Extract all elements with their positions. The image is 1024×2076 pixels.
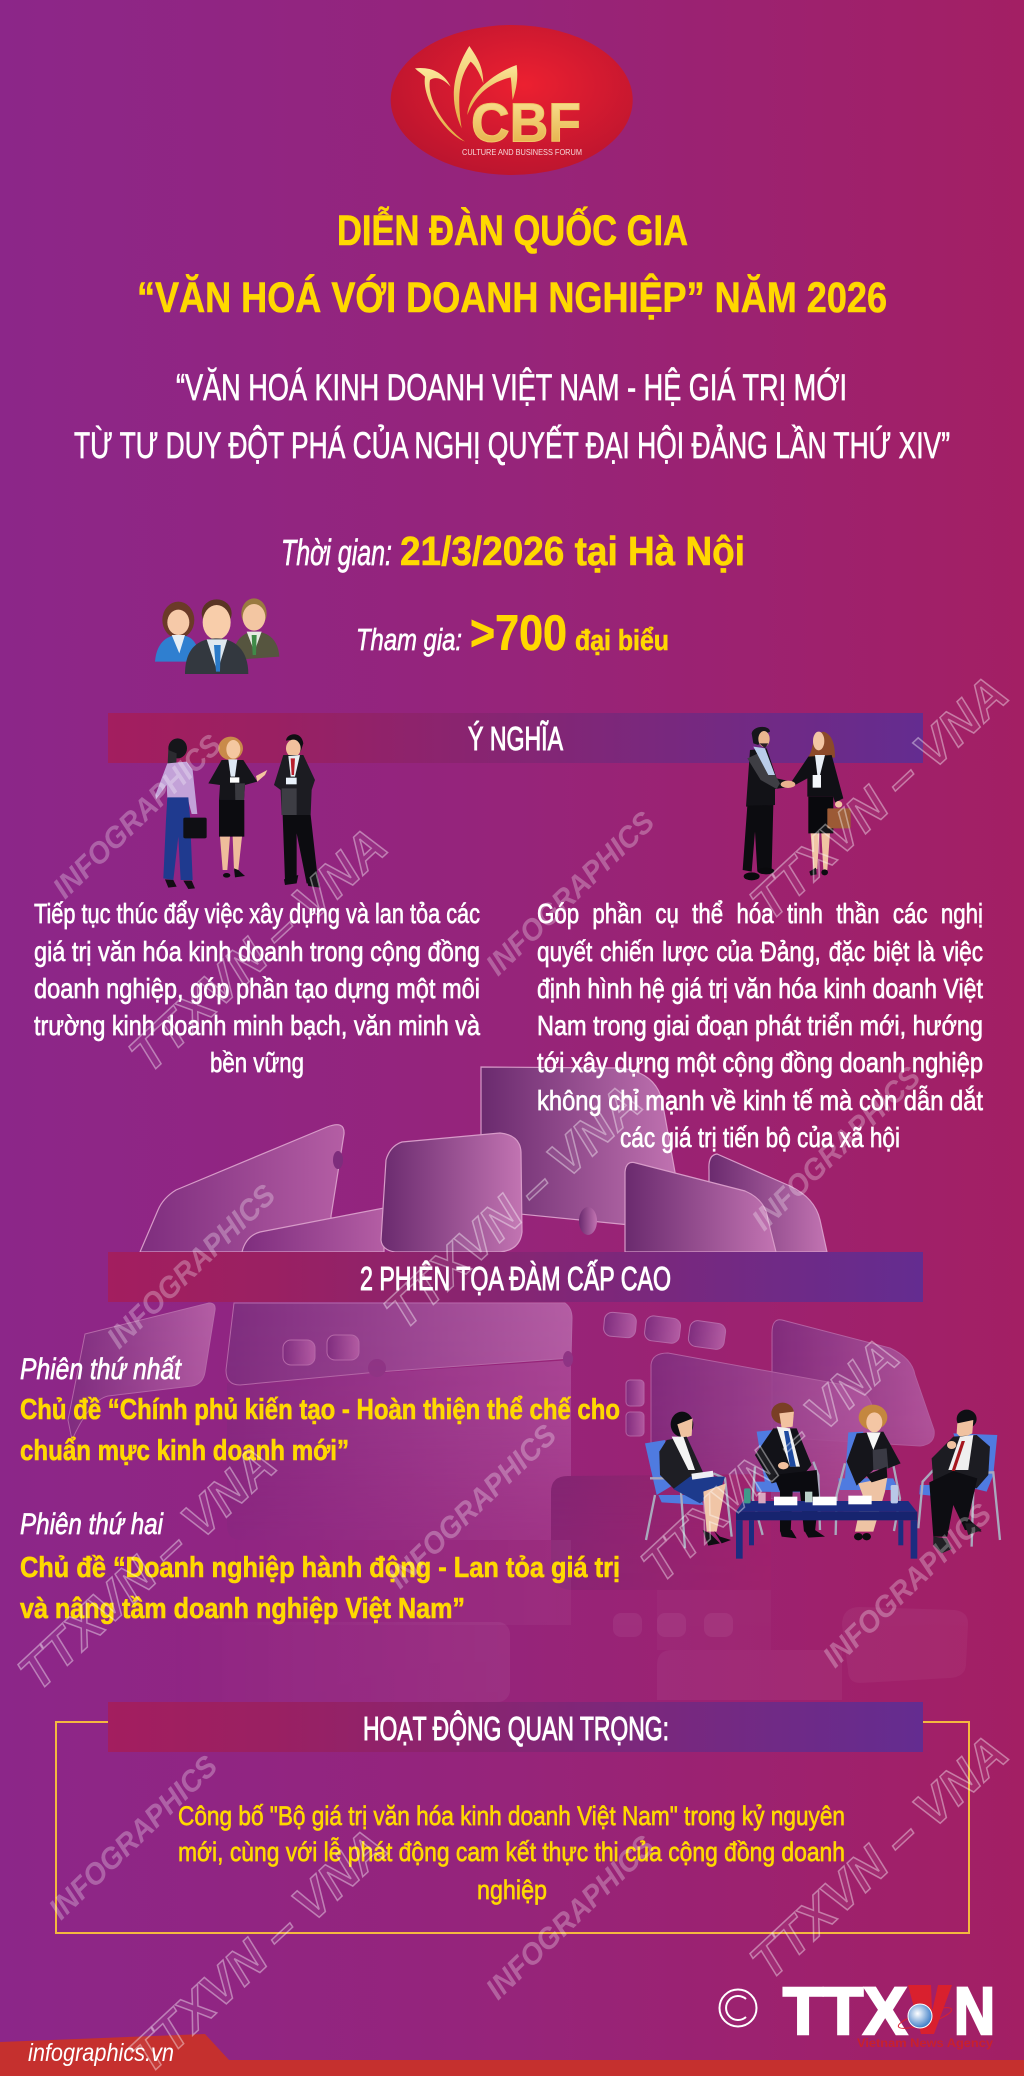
participants: >700 <box>470 605 567 661</box>
person: woman left <box>659 1412 731 1546</box>
banner: HOẠT ĐỘNG QUAN TRỌNG: HOẠT ĐỘNG QUAN TRỌNG: <box>363 1710 669 1747</box>
footer text: infographics.vn <box>28 2039 174 2067</box>
banner: Ý NGHĨA <box>108 713 923 763</box>
text: first session <box>20 1353 620 1467</box>
watermarks: INFOGRAPHICS <box>382 1418 563 1595</box>
text: key activity: nghiệp <box>477 1875 547 1905</box>
logo: TTXVN: Vietnam News Agency <box>857 2036 993 2050</box>
background illustration: lower devices <box>68 1303 968 1702</box>
watermarks: INFOGRAPHICS <box>746 1060 927 1237</box>
text: key activity <box>178 1801 845 1905</box>
text: key activity: mới, cùng với lễ phát động cam kết thực thi của cộng đồng doanh <box>178 1836 845 1867</box>
footer ribbon <box>0 2034 1024 2076</box>
logo: CBF: CULTURE AND BUSINESS FORUM <box>462 147 582 157</box>
person: man with blue tie <box>755 1403 825 1538</box>
text: second session: Phiên thứ hai <box>20 1508 164 1541</box>
text: second session: Chủ đề “Doanh nghiệp hành động - Lan tỏa giá trị <box>20 1552 620 1584</box>
text: key activity: Công bố "Bộ giá trị văn hóa kinh doanh Việt Nam" trong kỷ nguyên <box>178 1801 845 1831</box>
background illustration: tablets and phones <box>140 1067 827 1252</box>
text: meaning left column: doanh nghiệp, góp phần tạo dựng một môi <box>34 973 480 1004</box>
table items <box>744 1485 898 1505</box>
time and place <box>281 528 745 574</box>
time and place: Thời gian: <box>281 532 392 573</box>
illustration: three business people talking <box>155 734 320 889</box>
logo: CBF <box>391 25 633 175</box>
text: meaning right column <box>537 898 983 1153</box>
text: second session <box>20 1508 620 1625</box>
text: second session: và nâng tầm doanh nghiệp Việt Nam” <box>20 1593 465 1625</box>
title: “VĂN HOÁ VỚI DOANH NGHIỆP” NĂM 2026 <box>137 273 887 322</box>
icon: three delegates <box>155 598 279 674</box>
person: woman with blonde hair <box>847 1405 901 1540</box>
text: meaning right column: các giá trị tiến bộ của xã hội <box>620 1122 900 1153</box>
logo: TTXVN <box>783 1974 995 2050</box>
banner: Ý NGHĨA: Ý NGHĨA <box>468 720 563 757</box>
panel: key activity box <box>56 1702 969 1933</box>
title: DIỄN ĐÀN QUỐC GIA <box>337 206 688 255</box>
chairs <box>645 1430 1000 1548</box>
banner: 2 PHIÊN TỌA ĐÀM CẤP CAO <box>108 1252 923 1302</box>
text: meaning left column: giá trị văn hóa kinh doanh trong cộng đồng <box>34 936 480 967</box>
banner: 2 PHIÊN TỌA ĐÀM CẤP CAO: 2 PHIÊN TỌA ĐÀM CẤP CAO <box>360 1260 671 1297</box>
text: meaning left column: Tiếp tục thúc đẩy việc xây dựng và lan tỏa các <box>34 898 480 929</box>
watermarks: TTXVN – VNA <box>739 665 1019 931</box>
watermarks: INFOGRAPHICS <box>101 1178 282 1355</box>
text: first session: Chủ đề “Chính phủ kiến tạo - Hoàn thiện thể chế cho <box>20 1394 620 1426</box>
watermarks: INFOGRAPHICS <box>43 1749 224 1926</box>
time and place: 21/3/2026 tại Hà Nội <box>400 528 745 574</box>
watermarks: INFOGRAPHICS <box>480 805 661 982</box>
icon: copyright <box>720 1990 756 2026</box>
person: man with red tie <box>929 1410 990 1553</box>
participants: Tham gia: <box>356 622 462 657</box>
subtitle <box>74 367 950 466</box>
watermarks <box>7 665 1019 2076</box>
text: first session: chuẩn mực kinh doanh mới” <box>20 1435 349 1467</box>
text: meaning left column: trường kinh doanh minh bạch, văn minh và <box>34 1010 480 1041</box>
participants: đại biểu <box>575 625 669 657</box>
table <box>736 1501 917 1559</box>
text: meaning left column: bền vững <box>210 1047 304 1078</box>
text: first session: Phiên thứ nhất <box>20 1353 182 1386</box>
watermarks: INFOGRAPHICS <box>47 728 228 905</box>
watermarks: TTXVN – VNA <box>7 1435 287 1701</box>
logo: TTXVN: TTX <box>783 1974 907 2049</box>
banner: HOẠT ĐỘNG QUAN TRỌNG <box>108 1702 923 1752</box>
logo: TTXVN: N <box>954 1974 995 2049</box>
illustration: two people shaking hands <box>743 727 851 880</box>
watermarks: TTXVN – VNA <box>630 1327 910 1593</box>
logo: CBF: CBF <box>471 92 581 154</box>
text: meaning left column <box>34 898 480 1078</box>
watermarks: INFOGRAPHICS <box>480 1829 661 2006</box>
title <box>137 206 887 322</box>
participants <box>356 605 669 661</box>
watermarks: TTXVN – VNA <box>373 1074 653 1340</box>
watermarks: TTXVN – VNA <box>118 817 398 1083</box>
illustration: panel discussion <box>645 1403 1000 1559</box>
watermarks: INFOGRAPHICS <box>817 1497 998 1674</box>
watermarks: TTXVN – VNA <box>739 1724 1019 1990</box>
